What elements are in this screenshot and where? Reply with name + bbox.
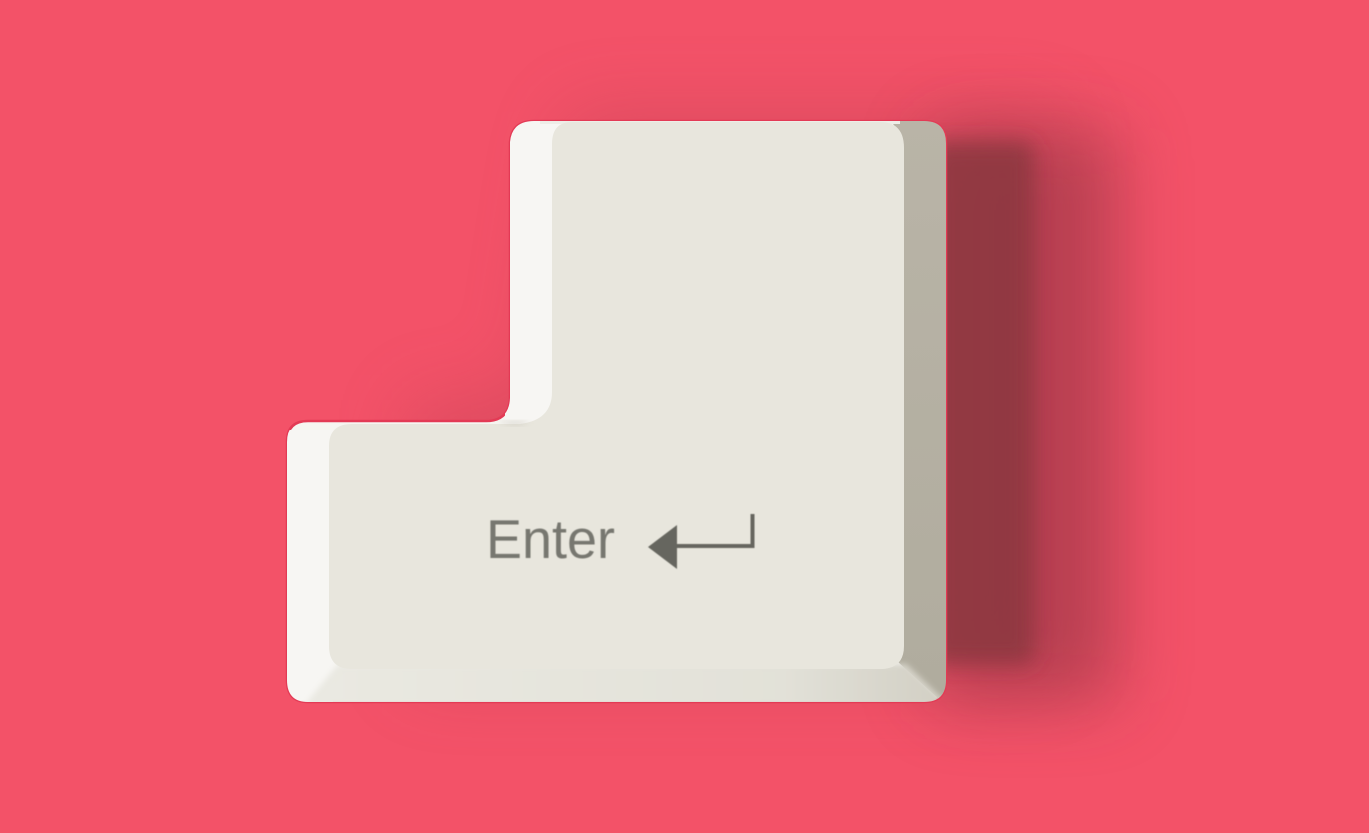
- bevel: right side: [893, 121, 946, 698]
- bevel: top edge: [540, 121, 900, 124]
- illustration: enter key on red background: [286, 80, 1154, 739]
- keycap edge: [287, 121, 946, 702]
- icon: return arrow: [648, 514, 752, 569]
- soft ambient shadow: [410, 112, 1060, 680]
- core cast shadow: [930, 142, 1034, 664]
- bevel: bottom side: [304, 664, 944, 706]
- corner shading: [498, 421, 530, 425]
- bevel: left sides: [287, 121, 540, 702]
- wide cast shadow: [930, 128, 1120, 703]
- keycap bevels: [280, 115, 950, 710]
- label: Enter: Enter: [486, 508, 615, 570]
- key face: [329, 122, 904, 669]
- keycap: [280, 115, 950, 710]
